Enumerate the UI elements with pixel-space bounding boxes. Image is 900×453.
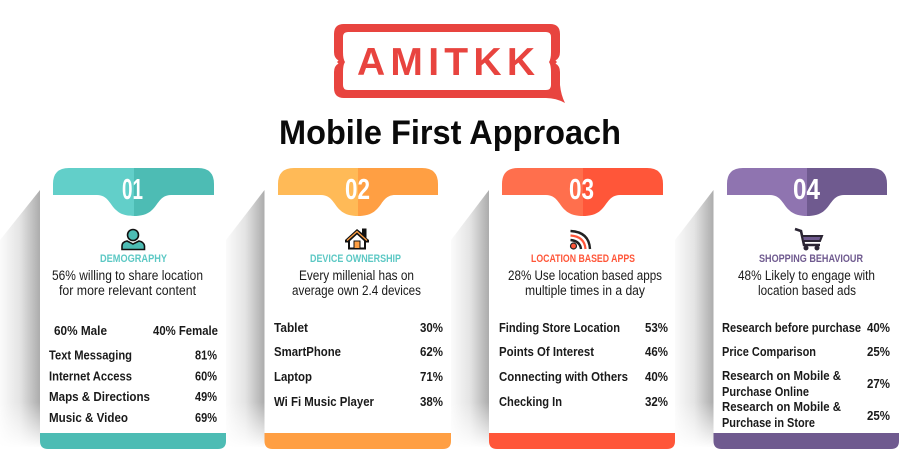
number: 04 — [793, 174, 820, 206]
number: 01 — [122, 174, 143, 206]
heading: DEMOGRAPHY — [100, 253, 168, 265]
icon: house — [345, 228, 369, 250]
description — [292, 268, 421, 298]
description: 48% Likely to engage with — [738, 268, 875, 283]
card body — [40, 190, 226, 449]
icon: person — [122, 230, 144, 250]
heading: LOCATION BASED APPS — [531, 253, 635, 265]
heading: SHOPPING BEHAVIOUR — [759, 253, 863, 265]
stats: 40% Female — [153, 324, 218, 338]
stats — [49, 324, 218, 425]
stats: Finding Store Location — [499, 321, 620, 335]
stats: Research on Mobile & — [722, 369, 841, 383]
stats: Purchase Online — [722, 385, 809, 399]
stats: 81% — [195, 348, 217, 362]
number: 03 — [569, 174, 594, 206]
stats: 53% — [645, 321, 668, 335]
stats — [722, 321, 890, 430]
stats: Checking In — [499, 395, 562, 409]
stats: 25% — [867, 345, 890, 359]
number tab — [727, 168, 887, 216]
card shadow — [451, 190, 489, 448]
panel: demography — [0, 168, 226, 449]
stats: Points Of Interest — [499, 345, 595, 359]
footer bar — [489, 433, 675, 449]
stats: SmartPhone — [274, 345, 341, 359]
number: 02 — [345, 174, 370, 206]
footer bar — [714, 433, 899, 449]
stats: Music & Video — [49, 411, 128, 425]
stats: 69% — [195, 411, 217, 425]
panel: location based apps — [451, 168, 675, 449]
card body — [264, 190, 451, 449]
description: Every millenial has on — [299, 268, 414, 283]
stats — [274, 321, 443, 409]
stats: Research on Mobile & — [722, 400, 841, 414]
stats: Text Messaging — [49, 348, 132, 362]
number tab — [502, 168, 663, 216]
icon: rss feed — [570, 231, 590, 249]
logo wordmark: AMITKK — [357, 41, 535, 84]
stats: 60% Male — [54, 324, 107, 338]
stats: Wi Fi Music Player — [274, 395, 374, 409]
stats: 49% — [195, 390, 217, 404]
stats: 38% — [420, 395, 443, 409]
stats: Research before purchase — [722, 321, 861, 335]
card shadow — [675, 190, 714, 448]
card body — [714, 190, 899, 449]
stats: 40% — [867, 321, 890, 335]
number tab — [278, 168, 438, 216]
footer bar — [40, 433, 226, 449]
stats: Price Comparison — [722, 345, 816, 359]
card body — [489, 190, 675, 449]
number tab — [53, 168, 214, 216]
stats: 62% — [420, 345, 443, 359]
card shadow — [0, 190, 40, 448]
stats: Maps & Directions — [49, 390, 150, 404]
card shadow — [226, 190, 265, 448]
description: 28% Use location based apps — [508, 268, 662, 283]
icon: shopping cart — [795, 229, 822, 250]
stats — [499, 321, 668, 409]
stats: 60% — [195, 370, 217, 384]
stats: 27% — [867, 377, 890, 391]
stats: 71% — [420, 370, 443, 384]
description — [52, 268, 203, 298]
stats: Purchase in Store — [722, 416, 815, 430]
description: location based ads — [758, 283, 856, 298]
stats: 40% — [645, 370, 668, 384]
description — [738, 268, 875, 298]
stats: 25% — [867, 409, 890, 423]
title: Mobile First Approach — [279, 114, 621, 152]
panel: shopping behaviour — [675, 168, 899, 449]
stats: 32% — [645, 395, 668, 409]
stats: Connecting with Others — [499, 370, 628, 384]
description: 56% willing to share location — [52, 268, 203, 283]
footer bar — [264, 433, 451, 449]
description: for more relevant content — [59, 283, 196, 298]
stats: 30% — [420, 321, 443, 335]
stats: 46% — [645, 345, 668, 359]
stats: Internet Access — [49, 370, 132, 384]
description — [508, 268, 662, 298]
description: multiple times in a day — [525, 283, 645, 298]
stats: Tablet — [274, 321, 309, 335]
stats: Laptop — [274, 370, 312, 384]
panel: device ownership — [226, 168, 451, 449]
heading: DEVICE OWNERSHIP — [310, 253, 401, 265]
logo — [334, 24, 565, 103]
description: average own 2.4 devices — [292, 283, 421, 298]
